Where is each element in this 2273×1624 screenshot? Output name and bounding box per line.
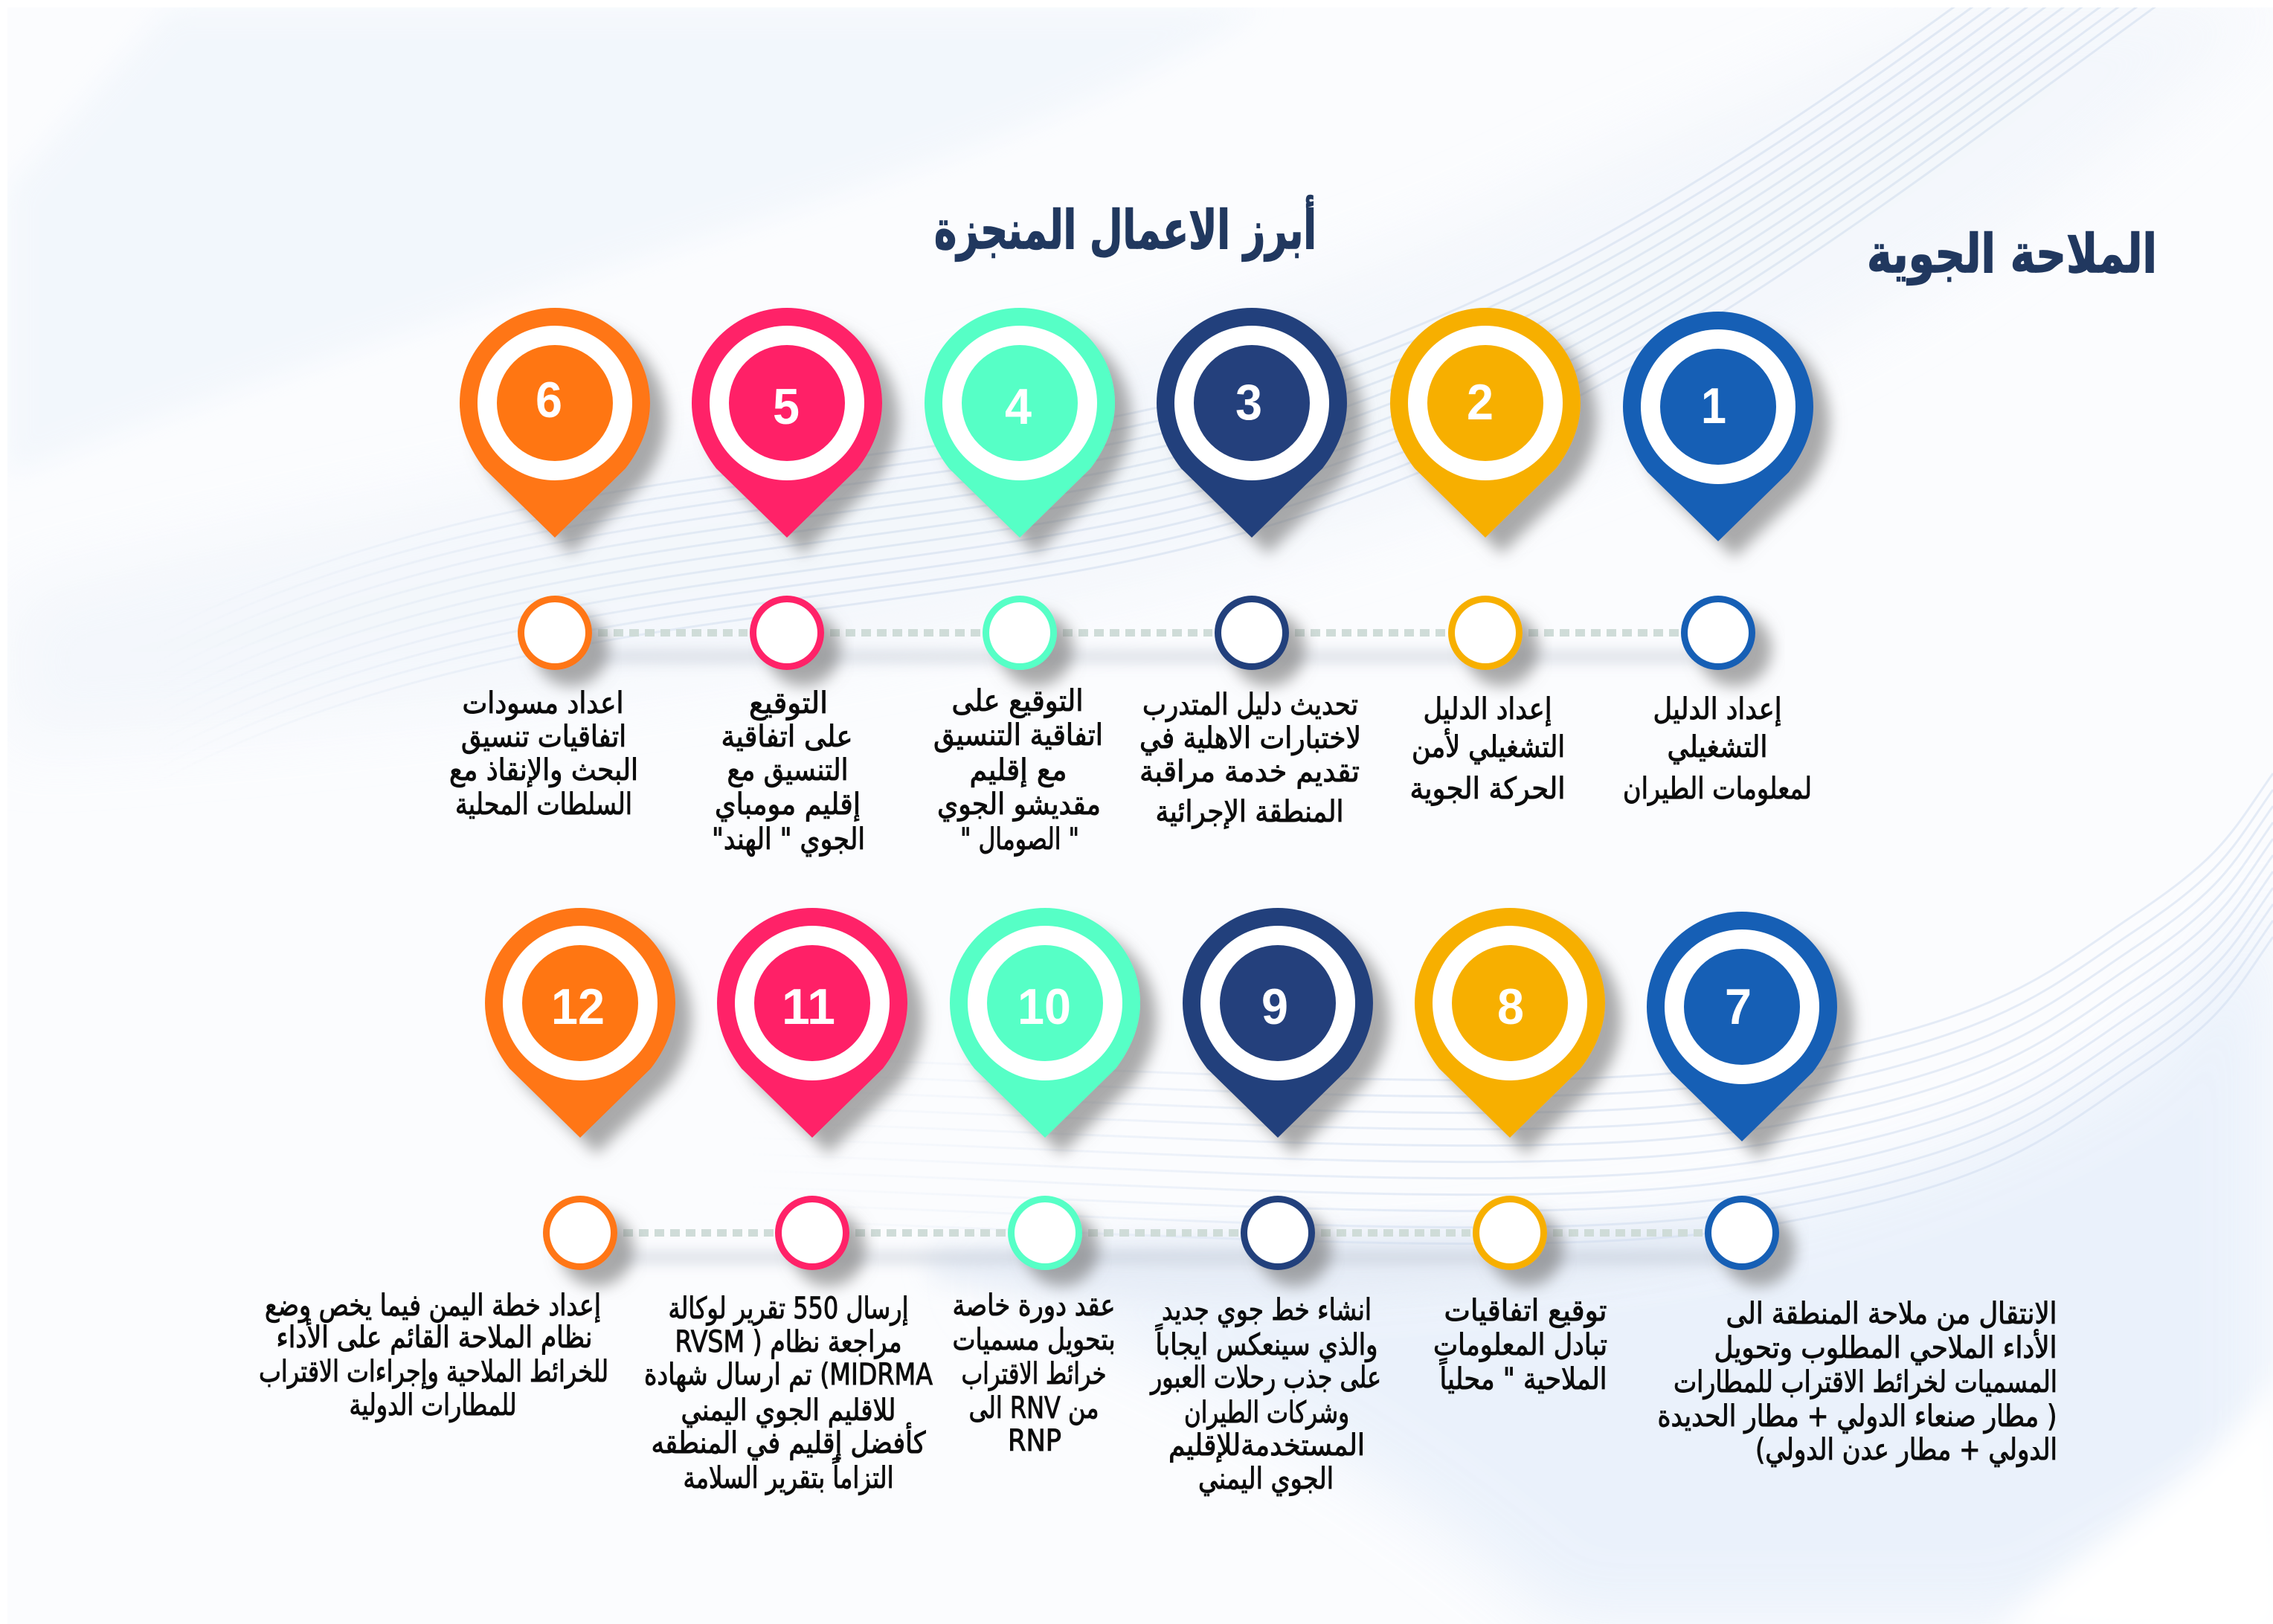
node 7 xyxy=(1705,1196,1779,1270)
pin 3 xyxy=(1157,308,1347,538)
description 9 xyxy=(1149,1293,1381,1496)
description 3: لاختبارات الاهلية في xyxy=(1139,721,1361,755)
pin 5 xyxy=(692,308,882,538)
pin 8 xyxy=(1415,908,1605,1138)
item 10 xyxy=(950,908,1140,1458)
description 11: كأفضل إقليم في المنطقه xyxy=(652,1422,926,1460)
description 6: اتفاقيات تنسيق xyxy=(461,720,626,754)
description 1: لمعلومات الطيران xyxy=(1623,772,1812,806)
item 3 xyxy=(1139,308,1361,829)
description 6: البحث والإنقاذ مع xyxy=(449,753,638,787)
description 12: نظام الملاحة القائم على الأداء xyxy=(277,1318,592,1355)
pin 4 xyxy=(925,308,1115,538)
description 12: إعداد خطة اليمن فيما يخص وضع xyxy=(265,1289,601,1323)
node 4 xyxy=(983,596,1057,670)
description 7: الدولي + مطار عدن الدولي) xyxy=(1755,1433,2057,1467)
description 5: إقليم مومباي xyxy=(715,787,861,822)
number 10: 10 xyxy=(1017,979,1071,1035)
node 9 xyxy=(1241,1196,1315,1270)
description 4 xyxy=(933,684,1103,857)
description 5 xyxy=(712,686,865,857)
description 7 xyxy=(1657,1297,2057,1467)
pin 9 xyxy=(1183,908,1373,1138)
item 11 xyxy=(644,908,933,1495)
description 6: السلطات المحلية xyxy=(455,787,632,822)
description 8: توقيع اتفاقيات xyxy=(1444,1294,1607,1328)
description 5: التنسيق مع xyxy=(727,753,848,787)
description 3: المنطقة الإجرائية xyxy=(1156,795,1343,829)
description 10 xyxy=(952,1289,1116,1458)
description 3: تحديث دليل المتدرب xyxy=(1142,688,1358,722)
description 9: وشركات الطيران xyxy=(1184,1396,1349,1430)
node 2 xyxy=(1448,596,1523,670)
number 11: 11 xyxy=(782,979,835,1035)
heading: أبرز الاعمال المنجزة: أبرز الاعمال المنجزة xyxy=(934,195,1316,262)
number 8: 8 xyxy=(1497,979,1524,1035)
node 12 xyxy=(543,1196,617,1270)
node 5 xyxy=(750,596,824,670)
description 9: الجوي اليمني xyxy=(1198,1462,1334,1496)
number 4: 4 xyxy=(1005,378,1032,435)
number 5: 5 xyxy=(773,378,800,435)
description 8: تبادل المعلومات xyxy=(1433,1328,1607,1362)
pin 7 xyxy=(1647,912,1837,1141)
description 9: المستخدمةللإقليم xyxy=(1168,1428,1365,1463)
description 5: على اتفاقية xyxy=(721,720,852,754)
node 10 xyxy=(1008,1196,1082,1270)
description 1 xyxy=(1623,692,1812,806)
description 11: التزاماً بتقرير السلامة xyxy=(683,1456,894,1495)
description 2: التشغيلي لأمن xyxy=(1412,728,1565,764)
item 1 xyxy=(1623,312,1813,806)
item 4 xyxy=(925,308,1115,857)
description 6: اعداد مسودات xyxy=(463,686,623,721)
description 12 xyxy=(259,1289,608,1422)
description 4: مقديشو الجوي xyxy=(937,787,1101,822)
pin 6 xyxy=(460,308,650,538)
pin 10 xyxy=(950,908,1140,1138)
description 1: إعداد الدليل xyxy=(1653,692,1782,726)
description 7: المسميات لخرائط الاقتراب للمطارات xyxy=(1674,1365,2057,1399)
number 9: 9 xyxy=(1261,979,1288,1035)
item 12 xyxy=(259,908,675,1422)
node 11 xyxy=(775,1196,849,1270)
description 1: التشغيلي xyxy=(1668,730,1767,764)
item 7 xyxy=(1647,912,2057,1467)
pin 11 xyxy=(717,908,907,1138)
description 4: " الصومال " xyxy=(960,822,1079,857)
description 9: انشاء خط جوي جديد xyxy=(1162,1293,1372,1327)
description 4: مع إقليم xyxy=(970,753,1067,787)
item 6 xyxy=(449,308,650,822)
number 2: 2 xyxy=(1467,374,1494,431)
description 5: التوقيع xyxy=(749,686,828,721)
description 6 xyxy=(449,686,638,822)
number 1: 1 xyxy=(1701,378,1726,434)
number 6: 6 xyxy=(536,372,562,428)
node 6 xyxy=(518,596,592,670)
item 8 xyxy=(1415,908,1607,1396)
description 7: ( مطار صنعاء الدولي + مطار الحديدة xyxy=(1657,1399,2057,1434)
description 7: الأداء الملاحي المطلوب وتحويل xyxy=(1714,1329,2057,1365)
node 8 xyxy=(1473,1196,1547,1270)
description 11 xyxy=(644,1292,933,1495)
pin 2 xyxy=(1390,308,1581,538)
pin 1 xyxy=(1623,312,1813,541)
description 3: تقديم خدمة مراقبة xyxy=(1139,755,1360,789)
item 2 xyxy=(1390,308,1581,806)
description 10: من RNV الى xyxy=(968,1391,1099,1425)
timeline connector: row 2 xyxy=(617,1233,1740,1263)
item 9 xyxy=(1149,908,1381,1496)
description 2 xyxy=(1410,692,1565,806)
description 2: إعداد الدليل xyxy=(1424,692,1552,726)
item 5 xyxy=(692,308,882,857)
description 4: اتفاقية التنسيق xyxy=(933,718,1103,753)
description 11: للاقليم الجوي اليمني xyxy=(681,1393,896,1428)
description 11: مراجعة نظام ( RVSM xyxy=(675,1325,901,1359)
description 12: للمطارات الدولية xyxy=(350,1388,516,1422)
description 4: التوقيع على xyxy=(952,684,1083,718)
description 9: والذي سينعكس ايجاباً xyxy=(1155,1323,1377,1362)
number 12: 12 xyxy=(551,979,605,1035)
description 12: للخرائط الملاحية وإجراءات الاقتراب xyxy=(259,1355,608,1389)
node 3 xyxy=(1215,596,1289,670)
description 5: الجوي " الهند" xyxy=(712,822,865,857)
description 11: MIDRMA) تم ارسال شهادة xyxy=(644,1358,933,1392)
description 10: RNP xyxy=(1008,1424,1061,1458)
description 11: إرسال 550 تقرير لوكالة xyxy=(668,1292,909,1326)
description 10: بتحويل مسميات xyxy=(952,1323,1116,1357)
pin 12 xyxy=(485,908,675,1138)
description 10: خرائط الاقتراب xyxy=(961,1357,1107,1391)
number 7: 7 xyxy=(1725,979,1752,1035)
description 10: عقد دورة خاصة xyxy=(952,1289,1116,1323)
description 3 xyxy=(1139,688,1361,829)
description 8: الملاحية " محلياً xyxy=(1439,1357,1607,1396)
description 2: الحركة الجوية xyxy=(1410,772,1565,806)
timeline connector: row 1 xyxy=(595,633,1718,662)
description 8 xyxy=(1433,1294,1607,1396)
number 3: 3 xyxy=(1235,374,1262,431)
description 7: الانتقال من ملاحة المنطقة الى xyxy=(1726,1297,2057,1331)
title: الملاحة الجوية: الملاحة الجوية xyxy=(1867,222,2157,286)
node 1 xyxy=(1681,596,1755,670)
description 9: على جذب رحلات العبور xyxy=(1149,1361,1381,1395)
